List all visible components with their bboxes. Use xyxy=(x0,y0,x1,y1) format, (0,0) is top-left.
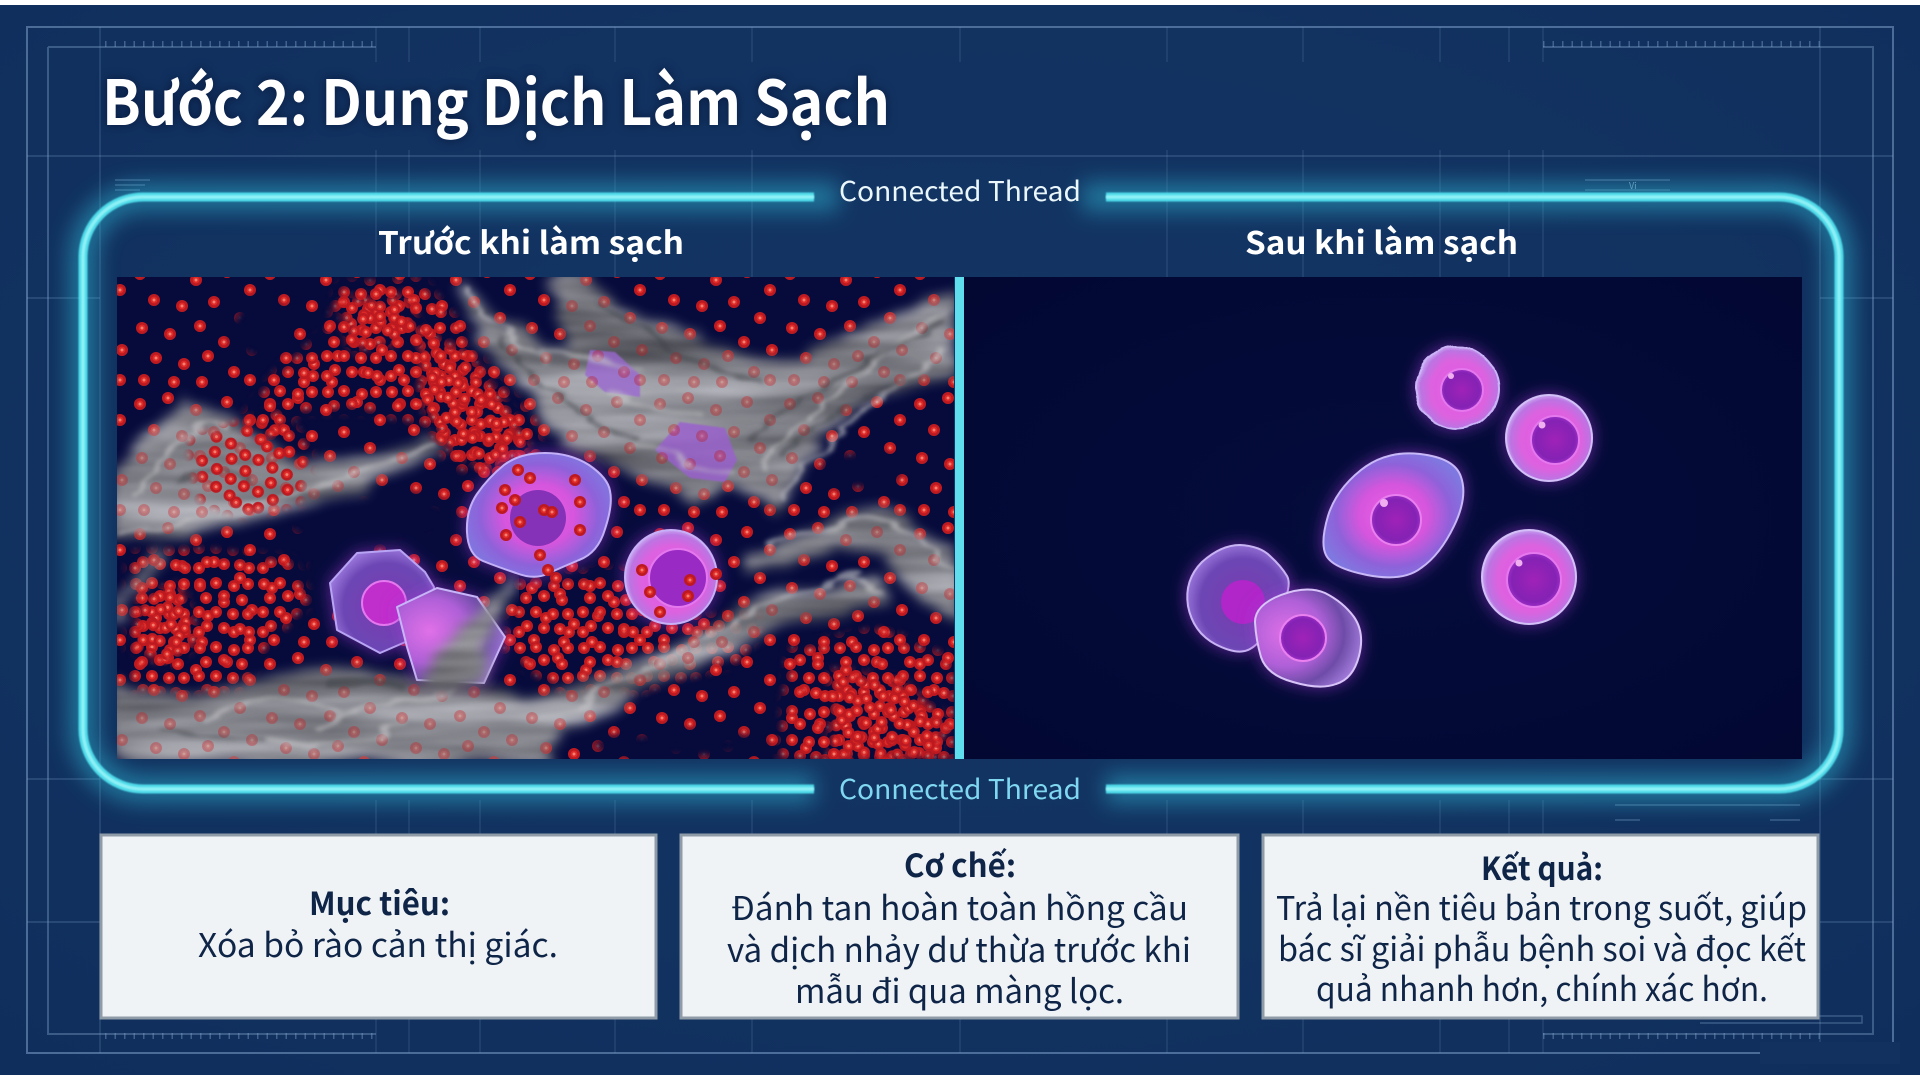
mechanism text: Đánh tan hoàn toàn hồng cầu xyxy=(731,882,1188,930)
lower diagonal fiber xyxy=(500,580,890,759)
heading: before cleaning: Trước khi làm sạch xyxy=(378,218,684,263)
mechanism text xyxy=(727,882,1191,1013)
purple cell lower left xyxy=(330,550,434,653)
right middle fiber xyxy=(745,505,960,630)
cell front overlapped xyxy=(1255,589,1361,687)
cell dim overlapped xyxy=(1187,545,1289,652)
fiber strands xyxy=(120,290,955,746)
panel: before cleaning microscope view xyxy=(110,277,960,765)
box: goal xyxy=(101,835,656,1018)
panel: after cleaning microscope view xyxy=(964,277,1802,759)
cell round upper right xyxy=(1506,395,1592,481)
large purple cell xyxy=(467,453,611,577)
dense upper cluster xyxy=(237,277,546,480)
small blueprint label: Vi xyxy=(1629,179,1637,192)
label: connected thread top: Connected Thread xyxy=(839,170,1081,209)
title: Bước 2: Dung Dịch Làm Sạch xyxy=(102,53,890,143)
result text xyxy=(1276,882,1807,1011)
result text: bác sĩ giải phẫu bệnh soi và đọc kết xyxy=(1278,923,1806,971)
goal text: Xóa bỏ rào cản thị giác. xyxy=(198,919,558,967)
cell round lower right xyxy=(1482,530,1576,624)
heading: after cleaning: Sau khi làm sạch xyxy=(1245,218,1518,263)
box: mechanism xyxy=(681,835,1238,1018)
mechanism heading: Cơ chế: xyxy=(904,841,1016,887)
neon connected thread frame xyxy=(83,197,1839,789)
grey fiber spike over cell xyxy=(415,573,514,695)
label: connected thread bottom: Connected Thread xyxy=(839,768,1081,807)
scattered red blood cells xyxy=(117,277,954,759)
pale red cells seen through fibers xyxy=(117,277,954,759)
goal heading: Mục tiêu: xyxy=(309,879,450,925)
left wedge fiber xyxy=(110,397,445,537)
result text: quả nhanh hơn, chính xác hơn. xyxy=(1316,963,1768,1011)
lower left fiber mass xyxy=(110,665,560,765)
red cells over purple cells xyxy=(496,464,722,618)
cell small scalloped xyxy=(1416,347,1498,429)
wedge cluster xyxy=(184,404,317,520)
densest cores xyxy=(117,277,954,759)
box: result xyxy=(1263,835,1818,1018)
grey tissue fibers xyxy=(110,277,960,765)
cyan divider between images xyxy=(955,277,964,759)
mechanism text: và dịch nhảy dư thừa trước khi xyxy=(727,924,1191,972)
mechanism text: mẫu đi qua màng lọc. xyxy=(795,965,1124,1013)
red cells clusters over fibers xyxy=(117,277,954,759)
purple cell lower middle xyxy=(397,588,505,683)
round purple cell xyxy=(625,530,717,624)
result heading: Kết quả: xyxy=(1481,844,1603,890)
medium red cell clusters under fibers xyxy=(122,543,954,759)
upper right fiber mass xyxy=(460,277,954,510)
thin left fiber xyxy=(117,555,160,620)
bottom right erased smudge xyxy=(1760,1042,1900,1064)
cell large central xyxy=(1323,453,1463,577)
result text: Trả lại nền tiêu bản trong suốt, giúp xyxy=(1276,882,1807,930)
faint purple cells inside fibers xyxy=(585,350,737,482)
